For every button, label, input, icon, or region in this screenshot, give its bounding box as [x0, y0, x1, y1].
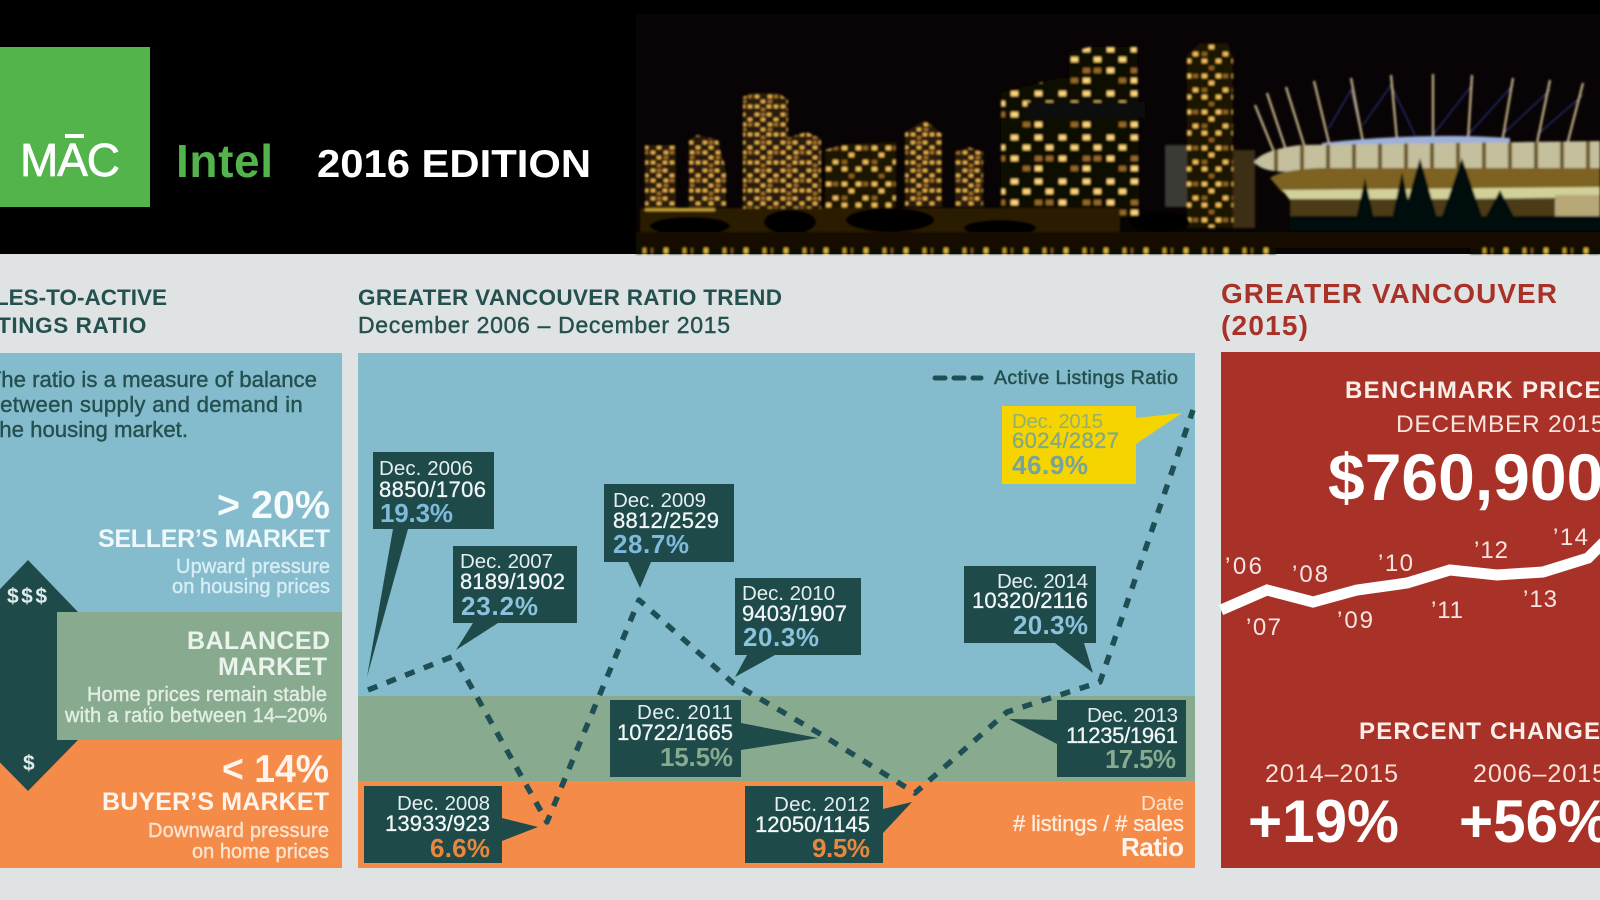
callout: Dec. 2015 highlighted: [1002, 406, 1182, 484]
buyer's market: Downward pressure: [148, 820, 329, 842]
callout: Dec. 2006: [367, 452, 494, 677]
stadium: [1254, 74, 1600, 230]
benchmark value: $760,900: [1328, 440, 1600, 514]
callout: Dec. 2015 highlighted: 46.9%: [1012, 450, 1088, 480]
callout: Dec. 2009: Dec. 2009: [613, 489, 706, 512]
callout: Dec. 2011: 10722/1665: [617, 720, 733, 745]
chart key: date, listings, sales, ratio: Ratio: [1121, 832, 1184, 862]
year labels: ’12: [1474, 537, 1508, 564]
year labels: ’08: [1292, 561, 1328, 588]
balanced market: with a ratio between 14–20%: [64, 705, 327, 727]
callout: Dec. 2013: 17.5%: [1105, 744, 1176, 774]
benchmark heading: DECEMBER 2015: [1396, 411, 1600, 438]
heading: ratio trend: GREATER VANCOUVER RATIO TREND: [358, 285, 782, 310]
heading: ratio trend: December 2006 – December 2015: [358, 312, 730, 338]
seller's market: > 20%: [217, 484, 330, 527]
photo: Vancouver skyline at night with stadium: [636, 14, 1600, 254]
panel: benchmark price: [1221, 352, 1600, 868]
callout: Dec. 2009: 28.7%: [613, 529, 689, 559]
callout: Dec. 2012: 12050/1145: [755, 812, 870, 837]
callout: Dec. 2010: [735, 578, 861, 677]
callout: Dec. 2008: 13933/923: [385, 811, 490, 836]
callout: Dec. 2011: 15.5%: [660, 742, 733, 772]
year labels: [1225, 524, 1588, 641]
callout: Dec. 2006: 19.3%: [380, 498, 453, 528]
callout: Dec. 2007: 8189/1902: [460, 569, 565, 594]
seller's market: on housing prices: [172, 576, 330, 598]
benchmark heading: [1345, 377, 1600, 438]
percent change heading: PERCENT CHANGE: [1359, 718, 1600, 745]
shoreline buildings base: [640, 208, 1120, 232]
callout: Dec. 2014: Dec. 2014: [997, 570, 1088, 593]
callout: Dec. 2015 highlighted: 6024/2827: [1012, 428, 1119, 453]
year labels: ’10: [1378, 550, 1413, 577]
callout: Dec. 2007: Dec. 2007: [460, 550, 553, 573]
balanced market: BALANCED: [187, 627, 330, 655]
callout: Dec. 2010: Dec. 2010: [742, 582, 835, 605]
seller's market: Upward pressure: [176, 556, 330, 578]
explainer text: [0, 367, 317, 442]
callout: Dec. 2010: 20.3%: [743, 622, 819, 652]
heading: ratio trend: [358, 285, 782, 338]
year labels: ’11: [1431, 597, 1463, 624]
arrow: price pressure: [0, 560, 78, 791]
year labels: ’13: [1523, 586, 1557, 613]
shoreline and water: [636, 232, 1600, 248]
callout: Dec. 2013: Dec. 2013: [1087, 704, 1178, 727]
callout: Dec. 2012: [745, 786, 912, 863]
callout: Dec. 2009: [604, 484, 734, 588]
heading: Greater Vancouver 2015: (2015): [1221, 310, 1308, 341]
callout: Dec. 2013: 11235/1961: [1066, 723, 1178, 748]
callout: Dec. 2010: 9403/1907: [742, 601, 847, 626]
callout: Dec. 2008: Dec. 2008: [397, 792, 490, 815]
balanced market: Home prices remain stable: [87, 684, 327, 706]
buyer's market: on home prices: [192, 841, 329, 863]
seller's market: SELLER’S MARKET: [98, 525, 330, 553]
chart key: date, listings, sales, ratio: Date: [1141, 792, 1184, 815]
callout: Dec. 2012: Dec. 2012: [774, 793, 870, 816]
buyer's market: BUYER’S MARKET: [102, 788, 329, 816]
callout: Dec. 2014: 10320/2116: [972, 588, 1088, 613]
header band: [0, 0, 1600, 254]
stat: 2014-2015: [1248, 760, 1399, 855]
panel: ratio trend chart: [358, 353, 1195, 868]
trees: [1290, 158, 1600, 230]
callout: Dec. 2013: [1009, 700, 1186, 777]
callout: Dec. 2011: Dec. 2011: [637, 701, 733, 724]
callout: Dec. 2009: 8812/2529: [613, 508, 719, 533]
balanced market: [64, 627, 330, 727]
line chart: active listings ratio: [368, 410, 1193, 822]
callout: Dec. 2006: Dec. 2006: [379, 457, 473, 480]
benchmark heading: BENCHMARK PRICE: [1345, 377, 1600, 404]
callout: Dec. 2007: 23.2%: [461, 591, 538, 621]
callout: Dec. 2015 highlighted: Dec. 2015: [1012, 410, 1103, 433]
stat: 2014-2015: +19%: [1248, 788, 1399, 855]
callout: Dec. 2011: [610, 700, 818, 777]
heading: Greater Vancouver 2015: [1221, 278, 1557, 341]
arrow: price pressure: $: [23, 752, 35, 775]
logo: MAC green square: [0, 47, 150, 207]
callout: Dec. 2008: [364, 786, 538, 863]
callout: Dec. 2012: 9.5%: [812, 833, 870, 863]
seller's market: [98, 484, 330, 598]
callout: Dec. 2014: 20.3%: [1013, 610, 1088, 640]
callout: Dec. 2014: [964, 566, 1096, 673]
line chart: benchmark price trend: [1221, 542, 1600, 610]
callout: Dec. 2008: 6.6%: [430, 833, 490, 863]
edition title: 2016 EDITION: [317, 143, 591, 186]
stat: 2014-2015: 2014–2015: [1265, 760, 1398, 788]
year labels: ’07: [1246, 614, 1281, 641]
arrow: price pressure: $$$: [7, 585, 47, 608]
buyer's market: [102, 748, 329, 863]
legend: Active Listings Ratio: [994, 367, 1178, 389]
logo word: Intel: Intel: [176, 135, 273, 187]
buyer's market: < 14%: [222, 748, 329, 791]
year labels: ’14: [1553, 524, 1588, 551]
heading: sales-to-active listings ratio: [0, 285, 167, 338]
panel: ratio explainer: [0, 353, 342, 868]
balanced market: MARKET: [218, 653, 327, 681]
logo: MAC green square: MAC: [20, 134, 120, 186]
heading: Greater Vancouver 2015: GREATER VANCOUVER: [1221, 278, 1557, 309]
callout: Dec. 2006: 8850/1706: [379, 477, 486, 502]
year labels: ’06: [1225, 553, 1262, 580]
chart key: date, listings, sales, ratio: [1013, 792, 1184, 862]
year labels: ’09: [1337, 607, 1373, 634]
chart key: date, listings, sales, ratio: # listings / # sales: [1013, 811, 1184, 836]
callout: Dec. 2007: [453, 546, 577, 650]
